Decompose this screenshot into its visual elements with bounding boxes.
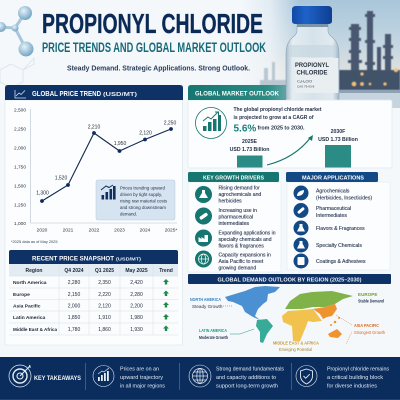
callout: price commentary: driven by tight supply, (120, 192, 162, 197)
application text: Coatings & Adhesives (316, 259, 366, 265)
CAGR text (234, 107, 322, 134)
driver text: Rising demand for (218, 186, 260, 192)
icon: rising bars (101, 185, 116, 200)
price snapshot table: Europe (13, 292, 30, 298)
driver text: Capacity expansions in (218, 252, 271, 258)
banner: key takeaways (0, 357, 400, 400)
callout: price commentary: and strong downstream (120, 205, 166, 210)
line chart: 2,000 (14, 146, 26, 152)
application text: (Herbicides, Insecticides) (316, 196, 372, 202)
price snapshot table: 2,220 (98, 292, 111, 298)
driver icons (195, 186, 212, 268)
price snapshot table: 2,200 (130, 304, 143, 310)
label: latin america: Moderate Growth (199, 335, 228, 340)
CAGR text: 5.6% (234, 124, 256, 134)
label: asia pacific: Strongest Growth (354, 330, 385, 335)
driver text: Expanding applications in (218, 230, 276, 236)
market outlook heading (188, 85, 286, 100)
price snapshot table: 2,420 (130, 280, 143, 286)
application text: Flavors & Fragrances (316, 226, 365, 232)
market outlook heading: GLOBAL MARKET OUTLOOK (195, 90, 279, 98)
price snapshot table: 2,000 (68, 304, 80, 310)
price snapshot table: North America (13, 280, 47, 286)
price snapshot table: Q1 2025 (95, 268, 114, 274)
label: europe: Stable Demand (358, 298, 384, 304)
molecule graphic (0, 6, 34, 88)
callout: price commentary (96, 180, 175, 220)
line chart: 1,000 (14, 221, 26, 227)
label: europe (358, 292, 384, 304)
label: north america (190, 297, 233, 309)
label: north america: NORTH AMERICA (190, 297, 222, 302)
market size bars (230, 129, 358, 168)
price snapshot table: Region (26, 268, 42, 274)
label: middle east and africa: Emerging Potential (279, 347, 312, 352)
price snapshot table: Middle East & Africa (13, 327, 57, 333)
line chart: 2,250 (14, 126, 26, 132)
demand heading: GLOBAL DEMAND OUTLOOK BY REGION (2025–2030) (218, 278, 362, 284)
line chart: 2,500 (14, 108, 26, 114)
price trend heading: (USD/MT) (103, 92, 137, 98)
application text: Agrochemicals (316, 188, 350, 194)
takeaway: demand fundamentals (189, 365, 284, 390)
price snapshot table: 1,980 (130, 315, 143, 321)
bottle label: CAS 79-03-8 (297, 84, 315, 88)
line chart: 2024 (140, 228, 151, 234)
price snapshot table: Trend (159, 268, 173, 274)
CAGR text: from 2025 to 2030. (258, 126, 305, 132)
price snapshot table: 2,350 (98, 280, 111, 286)
icon: chemical bottle (286, 6, 339, 103)
bottle label: C₃H₅ClO (297, 80, 312, 84)
line chart: 2,210 (88, 124, 100, 130)
takeaway: upward prices: upward trajectory (120, 375, 163, 381)
price snapshot table: RECENT PRICE SNAPSHOT (32, 256, 114, 262)
driver text: specialty chemicals and (218, 237, 272, 243)
price snapshot table: 1,780 (68, 327, 80, 333)
tagline: Steady Demand. Strategic Applications. Strong Outlook. (67, 64, 250, 72)
bottle label: CHLORIDE (296, 70, 328, 76)
world map (225, 286, 353, 343)
line chart: 2025* (165, 228, 177, 234)
application text: Specialty Chemicals (316, 243, 362, 249)
takeaway: demand fundamentals: support long-term growth (216, 384, 278, 390)
takeaway: upward prices: Prices are on an (120, 366, 159, 372)
driver text: pharmaceutical (218, 214, 253, 220)
line chart: 2021 (63, 228, 74, 234)
label: asia pacific (336, 315, 385, 344)
line chart: 1,520 (55, 176, 67, 182)
label: north america: Steady Growth (192, 304, 223, 309)
label: latin america: LATIN AMERICA (199, 328, 228, 333)
line chart: 2022 (89, 228, 100, 234)
bottle label: PROPIONYL (295, 62, 329, 69)
market size bars: USD 1.73 Billion (230, 147, 269, 153)
line chart: 1,750 (14, 164, 26, 170)
label: asia pacific: ASIA PACIFIC (354, 323, 380, 328)
icon: growth chart (196, 108, 226, 138)
title: PROPIONYL CHLORIDE (42, 8, 263, 39)
price trend heading: GLOBAL PRICE TREND (32, 91, 101, 98)
footnote: *2025 data as of May 2025 (11, 239, 58, 244)
demand heading (188, 274, 391, 284)
takeaway: demand fundamentals: Strong demand fundamentals (216, 366, 284, 372)
price snapshot table: 1,910 (98, 315, 111, 321)
CAGR text: The global propionyl chloride market (234, 107, 322, 113)
driver text: Increasing use in (218, 208, 257, 214)
price snapshot table: 1,850 (68, 315, 80, 321)
application text: Pharmaceutical (316, 206, 351, 212)
subtitle: PRICE TRENDS AND GLOBAL MARKET OUTLOOK (42, 40, 266, 55)
hero image: refinery skyline (240, 0, 400, 108)
line chart: 2020 (37, 228, 48, 234)
panel: global demand outlook (188, 274, 391, 352)
takeaway: critical building block: Propionyl chloride remains (327, 366, 389, 372)
price snapshot table: 2,280 (68, 280, 80, 286)
price trend heading (5, 85, 183, 100)
icon: target (9, 365, 31, 387)
line chart: 1,500 (14, 184, 26, 190)
line chart: 1,300 (36, 190, 49, 196)
market size bars: 2030F (331, 129, 345, 135)
callout: price commentary: demand. (120, 212, 137, 216)
callout: price commentary: rising raw material costs (120, 198, 168, 204)
CAGR text: is projected to grow at a CAGR of (234, 115, 314, 121)
applications heading: MAJOR APPLICATIONS (302, 176, 364, 182)
line chart: 2023 (114, 228, 125, 234)
panel: major applications (286, 172, 390, 270)
line chart: 2,120 (139, 130, 152, 136)
label: europe: EUROPE (358, 292, 377, 297)
line chart (14, 108, 177, 234)
line chart: 1,950 (114, 141, 126, 147)
driver text: growing demand (218, 266, 256, 272)
price snapshot table (9, 250, 178, 335)
application icons (294, 186, 308, 268)
panel: global market outlook (188, 85, 392, 168)
price snapshot table: May 2025 (125, 268, 148, 274)
price snapshot table: 2,280 (130, 292, 143, 298)
price snapshot table: Q4 2024 (64, 268, 84, 274)
panel: key growth drivers (188, 172, 281, 272)
driver text: agrochemicals and (218, 192, 261, 198)
key takeaways label: KEY TAKEAWAYS (34, 375, 81, 382)
price snapshot table: 1,860 (98, 327, 111, 333)
label: middle east and africa (273, 340, 320, 352)
price snapshot table: Asia Pacific (13, 304, 41, 310)
takeaway: critical building block (296, 366, 389, 390)
driver text: flavors & fragrances (218, 244, 264, 250)
price snapshot table: (USD/MT) (116, 256, 141, 262)
label: middle east and africa: MIDDLE EAST & AFRICA (273, 340, 320, 346)
takeaway: upward prices: in all major regions (120, 384, 165, 390)
line chart: 1,250 (14, 202, 26, 208)
application text (316, 188, 372, 265)
takeaway: upward prices (93, 366, 165, 390)
price snapshot table: Latin America (13, 315, 45, 321)
price snapshot table: 2,120 (98, 304, 111, 310)
takeaway: critical building block: for diverse industries (327, 384, 377, 390)
driver text: herbicides (218, 198, 242, 204)
trend arrows (163, 279, 169, 331)
drivers heading: KEY GROWTH DRIVERS (203, 176, 264, 182)
bottle label (295, 58, 338, 93)
market size bars: USD 1.73 Billion (318, 137, 358, 143)
driver text: intermediates (218, 221, 250, 227)
application text: Intermediates (316, 213, 347, 219)
takeaway: critical building block: a critical building block (327, 375, 383, 381)
line chart: 2,250 (164, 120, 176, 126)
market size bars: 2025E (242, 139, 258, 145)
map labels (190, 292, 385, 352)
driver text: Asia Pacific to meet (218, 259, 264, 265)
price snapshot table: 2,150 (68, 292, 80, 298)
takeaway: demand fundamentals: and capacity additions to (216, 375, 276, 381)
driver text (218, 186, 276, 272)
label: latin america (199, 328, 254, 340)
price snapshot table: 1,930 (130, 327, 143, 333)
panel: global price trend (5, 85, 183, 345)
callout: price commentary: Prices trending upward (120, 186, 165, 190)
